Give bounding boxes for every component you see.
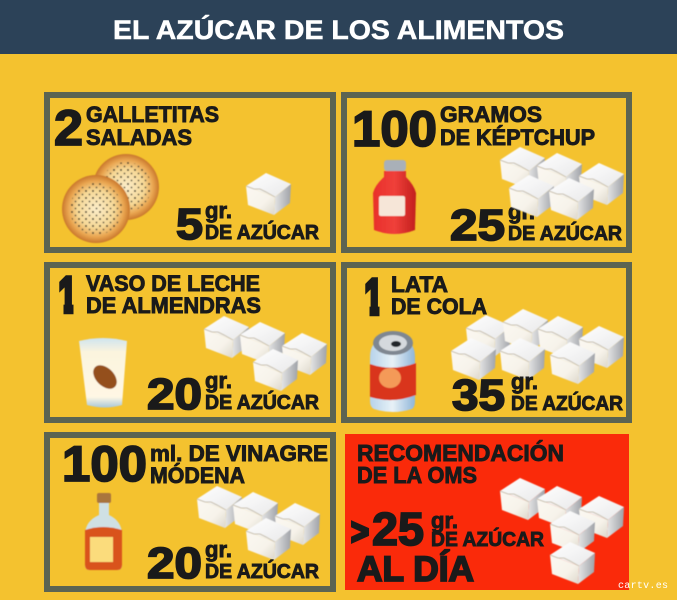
panel: galletitas saladas <box>47 95 333 250</box>
icon: glass of milk <box>79 338 127 408</box>
panel: ketchup <box>344 95 629 250</box>
icon: crackers <box>62 154 159 243</box>
icon: sugar cubes <box>500 147 624 220</box>
amount: 20 gr. de azúcar: DE AZÚCAR <box>205 559 320 583</box>
heading: recomendación de la OMS: DE LA OMS <box>357 462 477 488</box>
icon: sugar cubes <box>451 309 624 384</box>
icon: sugar cubes <box>500 478 624 584</box>
amount: 35 gr. de azúcar: 35 <box>452 371 505 420</box>
text: al día: AL DÍA <box>357 549 474 589</box>
heading: recomendación de la OMS <box>357 439 564 488</box>
amount: 5 gr. de azúcar <box>176 198 320 249</box>
amount: 25 gr. de azúcar: 25 <box>450 201 505 250</box>
icon: vinegar bottle <box>85 493 122 570</box>
label: galletitas saladas: GALLETITAS <box>86 102 219 127</box>
amount: 35 gr. de azúcar: gr. <box>511 369 538 394</box>
label: gramos de ketchup: GRAMOS <box>440 102 542 127</box>
amount: 20 gr. de azúcar: 20 <box>147 370 202 419</box>
label: ml. de vinagre módena <box>150 441 328 488</box>
quantity 1: 1 <box>364 269 382 325</box>
amount: 35 gr. de azúcar <box>452 369 624 420</box>
amount: 25 gr. de azúcar: gr. <box>508 199 535 224</box>
quantity 2: 2 <box>54 100 83 156</box>
icon: sugar cube <box>246 173 291 215</box>
panel: lata de cola <box>344 265 629 420</box>
amount: 20 gr. de azúcar <box>147 368 320 419</box>
quantity 100: 100 <box>62 436 147 492</box>
amount: 20 gr. de azúcar: 20 <box>147 539 202 588</box>
amount: más de 25 gr. de azúcar <box>351 503 545 555</box>
amount: 20 gr. de azúcar: gr. <box>205 537 232 562</box>
amount: 25 gr. de azúcar <box>450 199 623 250</box>
label: lata de cola <box>391 272 487 319</box>
heading: recomendación de la OMS: RECOMENDACIÓN <box>357 439 564 466</box>
panel: recomendación de la OMS <box>345 434 629 590</box>
icon: ketchup bottle <box>373 160 416 234</box>
label: vaso de leche de almendras: DE ALMENDRAS <box>86 293 261 318</box>
amount: 35 gr. de azúcar: DE AZÚCAR <box>511 391 624 415</box>
label: gramos de ketchup: DE KÉPTCHUP <box>440 125 595 150</box>
label: galletitas saladas <box>86 102 219 150</box>
label: ml. de vinagre módena: ml. DE VINAGRE <box>150 441 328 466</box>
amount: 25 gr. de azúcar: DE AZÚCAR <box>508 221 623 245</box>
amount: 5 gr. de azúcar: 5 <box>176 200 203 249</box>
panel: leche de almendras <box>47 265 333 420</box>
amount: más de 25 gr. de azúcar: DE AZÚCAR <box>431 527 545 551</box>
label: gramos de ketchup <box>440 102 595 150</box>
label: lata de cola: DE COLA <box>391 294 487 319</box>
icon: sugar cubes <box>204 316 327 391</box>
label: vaso de leche de almendras <box>86 271 261 318</box>
amount: 5 gr. de azúcar: DE AZÚCAR <box>205 220 320 244</box>
watermark: cartv.es <box>618 581 668 592</box>
header bar <box>0 0 677 54</box>
amount: más de 25 gr. de azúcar: > <box>351 511 369 552</box>
panel: vinagre de módena <box>47 435 333 589</box>
quantity 100: 100 <box>352 101 437 157</box>
label: ml. de vinagre módena: MÓDENA <box>150 463 245 488</box>
amount: 20 gr. de azúcar: gr. <box>205 368 232 393</box>
label: lata de cola: LATA <box>391 272 448 297</box>
amount: 5 gr. de azúcar: gr. <box>205 198 232 223</box>
amount: 20 gr. de azúcar <box>147 537 320 588</box>
label: galletitas saladas: SALADAS <box>86 125 192 150</box>
label: vaso de leche de almendras: VASO DE LECHE <box>86 271 260 296</box>
title: EL AZÚCAR DE LOS ALIMENTOS <box>113 14 564 45</box>
icon: sugar cubes <box>197 486 320 560</box>
amount: 20 gr. de azúcar: DE AZÚCAR <box>205 390 320 414</box>
icon: cola can <box>370 331 416 412</box>
amount: más de 25 gr. de azúcar: gr. <box>431 508 458 533</box>
amount: más de 25 gr. de azúcar: 25 <box>372 503 424 555</box>
quantity 1: 1 <box>58 267 76 323</box>
